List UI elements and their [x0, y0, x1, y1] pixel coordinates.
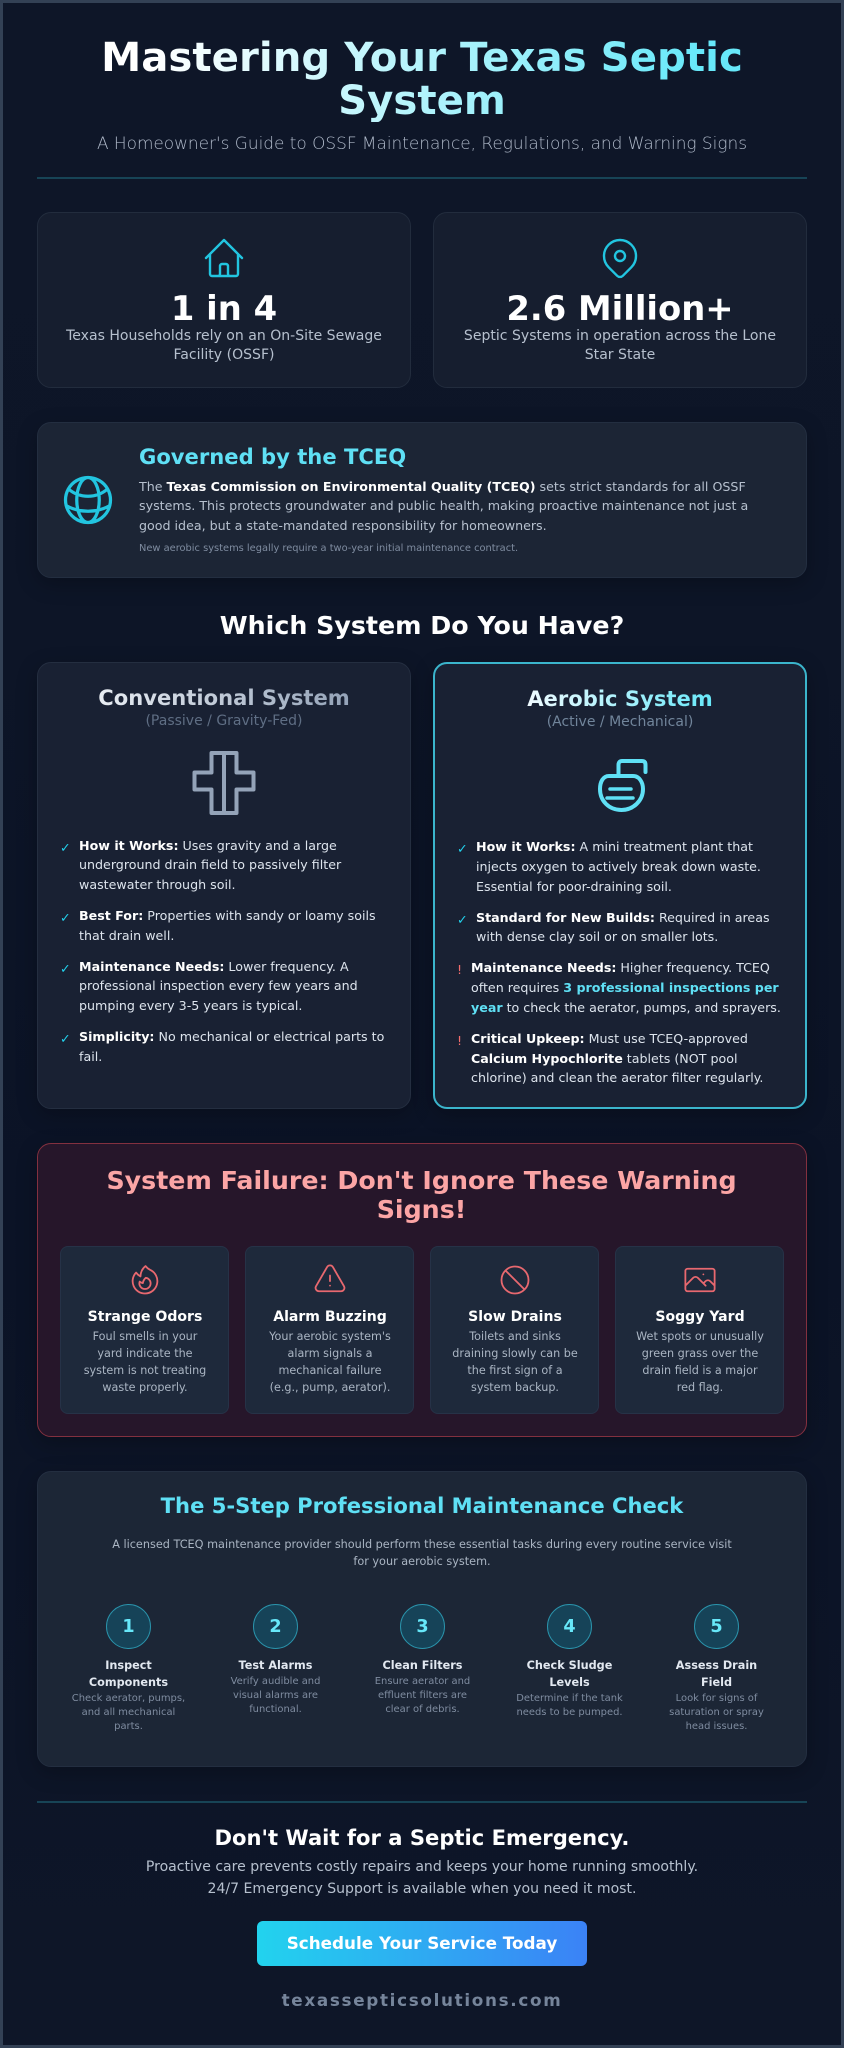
body text: good idea, but a state-mandated responsibility for homeowners.	[139, 518, 547, 533]
panel: aerobic system: Standard for New Builds: Required in areas	[476, 910, 770, 924]
check list	[457, 839, 781, 1085]
call-to-action button: Schedule Your Service Today	[287, 1933, 557, 1953]
intro text	[112, 1538, 732, 1568]
panel: aerobic system: with dense clay soil or on smaller lots.	[476, 929, 718, 944]
footer text	[146, 1859, 698, 1897]
step description	[72, 1693, 185, 1732]
intro text: for your aerobic system.	[353, 1555, 491, 1568]
panel: 5-step check	[37, 1471, 807, 1767]
panel: aerobic system: chlorine) and clean the aerator filter regularly.	[471, 1070, 763, 1085]
icon: flame	[132, 1265, 158, 1294]
note: New aerobic systems legally require a two-year initial maintenance contract.	[139, 543, 518, 554]
description: alarm signals a	[287, 1347, 372, 1360]
card subtitle: (Active / Mechanical)	[547, 714, 693, 730]
description: Wet spots or unusually	[636, 1330, 764, 1343]
step description: parts.	[114, 1721, 143, 1732]
stat caption: Facility (OSSF)	[173, 347, 275, 363]
step title: Assess Drain	[676, 1659, 757, 1672]
card title: Aerobic System	[527, 686, 713, 711]
icon: cross with pipe	[192, 751, 256, 815]
panel: conventional system: ✓	[60, 840, 71, 854]
step description	[516, 1693, 623, 1718]
step 1	[72, 1604, 185, 1732]
step description: Determine if the tank	[516, 1693, 623, 1704]
warning: alarm buzzing	[245, 1246, 414, 1414]
panel: aerobic system: year to check the aerator, pumps, and sprayers.	[471, 1000, 781, 1015]
step description: Verify audible and	[231, 1676, 320, 1687]
panel: warning signs	[37, 1143, 807, 1437]
step number: 1	[122, 1617, 135, 1637]
description: mechanical failure	[278, 1364, 382, 1377]
panel: conventional system: ✓	[60, 961, 71, 976]
panel: aerobic system: ✓	[457, 841, 468, 856]
step description	[375, 1676, 470, 1715]
step description	[669, 1693, 764, 1732]
step title: Levels	[549, 1676, 590, 1689]
description: Toilets and sinks	[469, 1330, 561, 1343]
step number: 3	[416, 1617, 429, 1637]
step number: 5	[710, 1617, 723, 1637]
title: System	[338, 77, 506, 124]
title	[0, 36, 844, 122]
step description: effluent filters are	[378, 1690, 467, 1701]
icon: aerator	[598, 759, 648, 812]
warning: slow drains	[430, 1246, 599, 1414]
step number: 4	[563, 1617, 576, 1637]
stat caption	[66, 328, 382, 363]
step description: saturation or spray	[669, 1707, 764, 1718]
panel: aerobic system: often requires 3 professional inspections per	[471, 980, 779, 995]
body text: systems. This protects groundwater and public health, making proactive maintenance not just a	[139, 498, 748, 513]
icon: location pin	[602, 238, 638, 278]
panel: conventional system: wastewater through soil.	[79, 877, 235, 892]
stat number: 1 in 4	[171, 288, 277, 328]
panel: aerobic system: ✓	[457, 912, 468, 926]
panel: conventional system: How it Works: Uses gravity and a large	[79, 838, 337, 852]
body text: The Texas Commission on Environmental Quality (TCEQ) sets strict standards for all OSSF	[139, 479, 746, 494]
footer text: 24/7 Emergency Support is available when you need it most.	[208, 1881, 636, 1897]
description: yard indicate the	[97, 1347, 193, 1360]
description: the first sign of a	[467, 1364, 563, 1377]
description	[452, 1330, 578, 1394]
step description: Ensure aerator and	[375, 1676, 470, 1687]
stat caption: Septic Systems in operation across the Lone	[464, 328, 776, 344]
step title: Inspect	[105, 1659, 152, 1672]
panel: conventional system: pumping every 3-5 years is typical.	[79, 998, 302, 1013]
stat number: 2.6 Million+	[506, 288, 734, 328]
step title	[89, 1659, 168, 1689]
panel: conventional system	[37, 662, 411, 1109]
step number	[694, 1604, 739, 1649]
icon: globe	[64, 476, 112, 524]
description: system is not treating	[84, 1364, 206, 1377]
warning: strange odors	[60, 1246, 229, 1414]
step description: visual alarms are	[233, 1690, 318, 1701]
check list	[60, 838, 384, 1064]
step description: head issues.	[686, 1721, 747, 1732]
panel: conventional system: fail.	[79, 1049, 102, 1064]
panel: conventional system: Maintenance Needs: Lower frequency. A	[79, 959, 349, 974]
panel: aerobic system: Critical Upkeep: Must use TCEQ-approved	[471, 1031, 748, 1046]
description: waste properly.	[102, 1381, 188, 1394]
heading: Governed by the TCEQ	[139, 444, 406, 469]
description: (e.g., pump, aerator).	[270, 1381, 390, 1394]
panel: conventional system: that drain well.	[79, 928, 174, 942]
website: texassepticsolutions.com	[282, 1990, 562, 2010]
description: drain field is a major	[642, 1364, 758, 1377]
description: Your aerobic system's	[269, 1330, 391, 1343]
step number	[400, 1604, 445, 1649]
title: Alarm Buzzing	[273, 1309, 387, 1325]
step 3	[375, 1604, 470, 1715]
step title: Components	[89, 1676, 168, 1689]
step description: needs to be pumped.	[516, 1707, 623, 1718]
icon: house	[204, 238, 244, 278]
panel: conventional system: ✓	[60, 1031, 71, 1046]
step title	[527, 1659, 612, 1689]
step title: Test Alarms	[239, 1659, 312, 1672]
panel: conventional system: underground drain field to passively filter	[79, 857, 341, 872]
description: red flag.	[677, 1381, 723, 1394]
title: Strange Odors	[88, 1309, 202, 1325]
step number	[106, 1604, 151, 1649]
title: Mastering Your Texas Septic	[101, 34, 743, 81]
step 4	[516, 1604, 623, 1718]
panel: aerobic system: Maintenance Needs: Higher frequency. TCEQ	[471, 960, 770, 975]
stat caption: Star State	[585, 347, 655, 363]
panel: aerobic system: Essential for poor-draining soil.	[476, 879, 672, 894]
icon: warning triangle	[314, 1264, 346, 1292]
panel: stat households	[37, 212, 411, 388]
section heading: The 5-Step Professional Maintenance Check	[161, 1493, 683, 1518]
step description: Check aerator, pumps,	[72, 1693, 185, 1704]
title: Soggy Yard	[655, 1309, 745, 1325]
step title: Check Sludge	[527, 1659, 612, 1672]
step title: Field	[701, 1676, 732, 1689]
panel: aerobic system: Calcium Hypochlorite tablets (NOT pool	[471, 1050, 737, 1066]
step number	[253, 1604, 298, 1649]
panel: conventional system: ✓	[60, 910, 71, 925]
call-to-action button	[257, 1921, 587, 1966]
step number: 2	[269, 1617, 282, 1637]
step 2	[230, 1604, 320, 1715]
subtitle: A Homeowner's Guide to OSSF Maintenance, Regulations, and Warning Signs	[97, 133, 747, 153]
step title: Clean Filters	[383, 1659, 462, 1672]
panel: aerobic system: !	[457, 962, 462, 977]
panel: stat systems	[433, 212, 807, 388]
step description: Look for signs of	[676, 1693, 757, 1704]
step description	[230, 1676, 320, 1715]
card subtitle: (Passive / Gravity-Fed)	[145, 713, 303, 729]
panel: TCEQ	[37, 422, 807, 578]
title: Slow Drains	[468, 1309, 562, 1325]
icon: no symbol	[500, 1266, 530, 1294]
description	[636, 1330, 764, 1394]
panel: aerobic system: How it Works: A mini treatment plant that	[476, 839, 753, 854]
step description: functional.	[249, 1704, 302, 1715]
description	[84, 1330, 206, 1394]
step 5	[669, 1604, 764, 1732]
panel: conventional system: Best For: Properties with sandy or loamy soils	[79, 908, 376, 923]
section heading: System Failure: Don't Ignore These Warning	[106, 1166, 737, 1195]
panel: aerobic system: !	[457, 1033, 462, 1048]
stat caption	[464, 328, 776, 363]
description: Foul smells in your	[93, 1330, 197, 1343]
footer text: Proactive care prevents costly repairs and keeps your home running smoothly.	[146, 1859, 698, 1875]
description: green grass over the	[642, 1347, 758, 1360]
step description: and all mechanical	[82, 1707, 175, 1718]
intro text: A licensed TCEQ maintenance provider should perform these essential tasks during every routine service visit	[112, 1538, 732, 1551]
step description: clear of debris.	[385, 1704, 460, 1715]
heading: which system: Which System Do You Have?	[220, 611, 624, 640]
description: system backup.	[471, 1381, 559, 1394]
body text	[138, 479, 748, 533]
section heading: Signs!	[377, 1194, 466, 1224]
description: draining slowly can be	[452, 1347, 578, 1360]
description	[269, 1330, 391, 1394]
footer heading: Don't Wait for a Septic Emergency.	[215, 1825, 629, 1850]
section heading	[106, 1166, 737, 1224]
panel: aerobic system	[433, 662, 807, 1109]
step title	[676, 1659, 757, 1689]
panel: conventional system: Simplicity: No mechanical or electrical parts to	[79, 1029, 384, 1044]
step number	[547, 1604, 592, 1649]
card title: Conventional System	[98, 685, 350, 710]
stat caption: Texas Households rely on an On-Site Sewage	[66, 328, 382, 344]
icon: landscape photo	[684, 1268, 716, 1292]
panel: conventional system: professional inspection every few years and	[79, 978, 358, 993]
warning: soggy yard	[615, 1246, 784, 1414]
panel: aerobic system: injects oxygen to actively break down waste.	[476, 859, 761, 874]
